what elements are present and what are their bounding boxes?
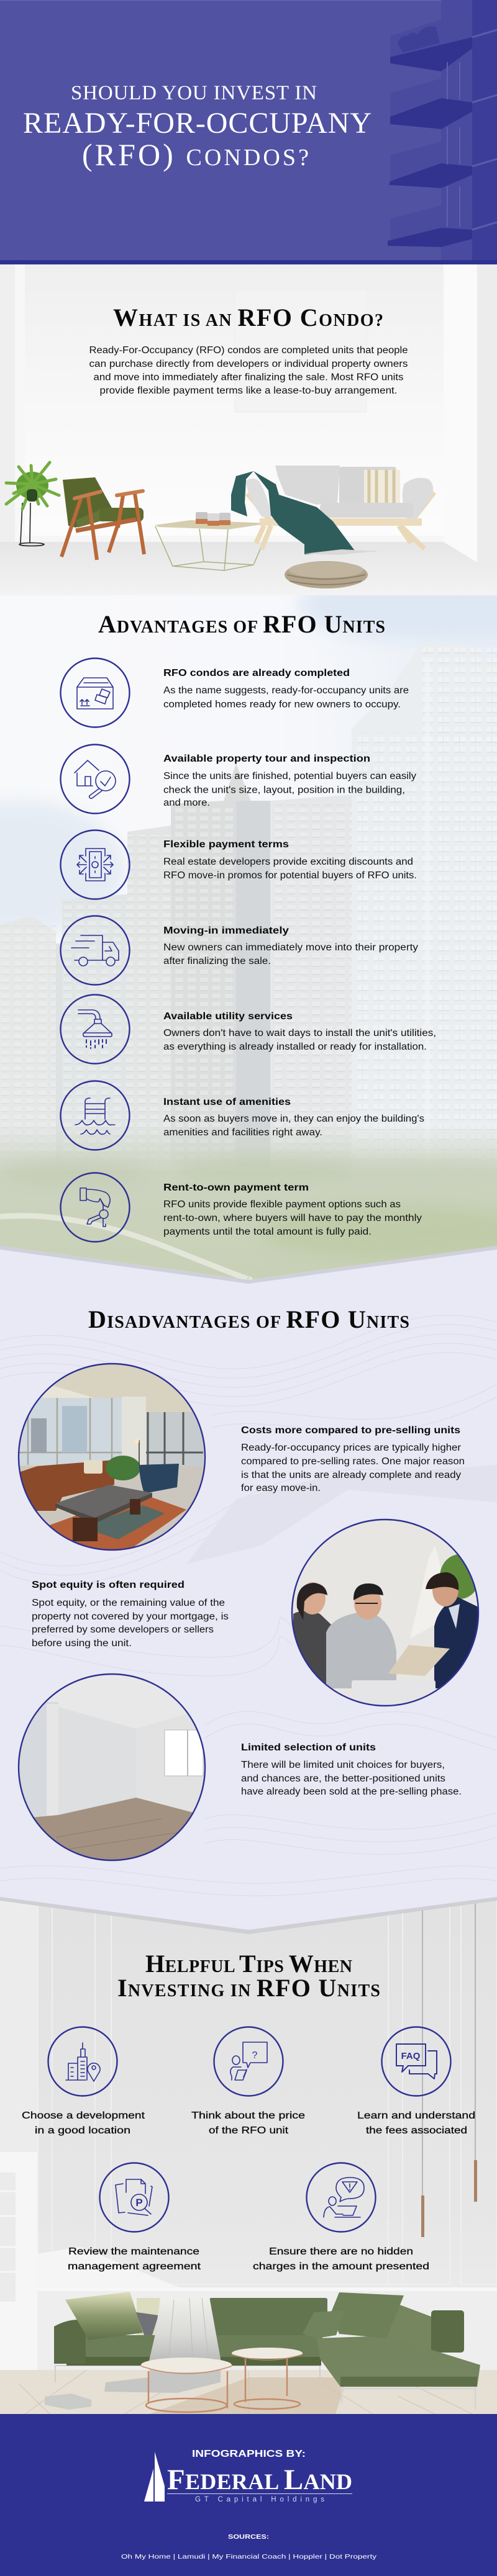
logo: Federal Land — [144, 2452, 352, 2503]
photo: empty room — [19, 1673, 205, 1862]
tip: choose a development: Choose a development — [22, 2110, 145, 2121]
image: green grounds — [0, 1124, 497, 1285]
title: SHOULD YOU INVEST IN — [71, 82, 317, 104]
item: amenities: Instant use of amenities — [163, 1097, 291, 1107]
item: rent to own — [61, 1173, 422, 1241]
image: condo balconies — [388, 0, 497, 260]
image: apartment towers — [0, 642, 497, 1279]
item: property tour: Available property tour and inspection — [163, 754, 370, 764]
icon: hand with keys — [80, 1188, 110, 1227]
heading: ADVANTAGES OF RFO UNITS — [98, 610, 385, 638]
item: amenities: As soon as buyers move in, they can enjoy the building's — [163, 1114, 424, 1124]
item: utilities — [61, 994, 436, 1064]
tip: think about the price — [191, 2027, 305, 2136]
text: costs more: Costs more compared to pre-selling units — [241, 1425, 460, 1436]
heading: HELPFUL TIPS WHEN — [145, 1950, 352, 1978]
panel: disadvantages of RFO units — [0, 1241, 497, 1934]
title — [23, 82, 372, 172]
text: costs more — [241, 1425, 465, 1493]
text: costs more: Ready-for-occupancy prices are typically higher — [241, 1443, 461, 1453]
image: sofa with teal throw — [231, 466, 434, 555]
description text: and move into immediately after finalizing the sale. Most RFO units — [93, 372, 404, 382]
item: amenities — [61, 1081, 424, 1150]
text: limited selection: and chances are, the better-positioned units — [241, 1773, 445, 1784]
description text: Ready-For-Occupancy (RFO) condos are completed units that people — [89, 345, 408, 356]
item: rent to own: Rent-to-own payment term — [163, 1182, 309, 1193]
item: utilities: Available utility services — [163, 1011, 293, 1022]
icon: house and magnifier — [75, 760, 116, 798]
text: limited selection: have already been sold at the pre-selling phase. — [241, 1786, 462, 1797]
item: flexible payment: RFO move-in promos for potential buyers of RFO units. — [163, 870, 417, 881]
text: costs more: compared to pre-selling rates. One major reason — [241, 1456, 465, 1467]
wall moulding panels — [38, 1887, 497, 2284]
text: costs more: for easy move-in. — [241, 1483, 321, 1493]
tip: review the maintenance agreement: P — [135, 2197, 143, 2209]
item: property tour: check the unit's size, layout, position in the building, — [163, 785, 405, 796]
item: rent to own: rent-to-own, where buyers will have to pay the monthly — [163, 1213, 422, 1223]
item: moving in: after finalizing the sale. — [163, 956, 271, 966]
tip: no hidden charges — [253, 2163, 429, 2272]
tip: review the maintenance agreement — [68, 2163, 201, 2272]
item: already completed: As the name suggests, ready-for-occupancy units are — [163, 685, 409, 696]
panel: footer — [0, 2414, 497, 2576]
tip: no hidden charges: charges in the amount presented — [253, 2261, 429, 2272]
item: rent to own: RFO units provide flexible payment options such as — [163, 1199, 401, 1210]
text: spot equity: Spot equity, or the remaining value of the — [32, 1598, 225, 1608]
item: moving in: New owners can immediately move into their property — [163, 942, 418, 953]
icon: pool ladder — [75, 1098, 115, 1134]
item: property tour: and more. — [163, 798, 210, 808]
heading — [117, 1950, 380, 2002]
description text: provide flexible payment terms like a lease-to-buy arrangement. — [99, 385, 398, 396]
heading: INVESTING IN RFO UNITS — [117, 1974, 380, 2002]
panel: advantages of RFO units — [0, 568, 497, 1285]
sources — [121, 2534, 377, 2560]
background wave lines — [0, 1315, 497, 1896]
tip: think about the price: ? — [252, 2050, 258, 2061]
text: costs more: is that the units are already complete and ready — [241, 1470, 461, 1480]
heading: DISADVANTAGES OF RFO UNITS — [88, 1305, 409, 1333]
logo: Federal Land: GT Capital Holdings — [195, 2496, 324, 2503]
image: round side tables — [45, 2348, 303, 2412]
text: limited selection: Limited selection of units — [241, 1742, 376, 1753]
tip: think about the price: Think about the price — [191, 2110, 305, 2121]
item: utilities: Owners don't have to wait days to install the unit's utilities, — [163, 1028, 436, 1038]
tip: learn the fees: the fees associated — [366, 2125, 467, 2136]
credit heading: INFOGRAPHICS BY: — [192, 2449, 306, 2459]
tip: think about the price: of the RFO unit — [209, 2125, 289, 2136]
item: property tour — [61, 745, 416, 813]
panel: helpful tips — [0, 1887, 497, 2415]
text: spot equity — [32, 1580, 229, 1649]
text: spot equity: preferred by some developers or sellers — [32, 1624, 214, 1635]
icon: delivery truck — [71, 935, 119, 966]
title: (RFO) CONDOS? — [82, 137, 309, 172]
image: green sectional sofa — [54, 2292, 480, 2410]
text: limited selection: There will be limited unit choices for buyers, — [241, 1760, 445, 1770]
title: READY-FOR-OCCUPANY — [23, 107, 372, 140]
image: coffee table with cups — [155, 512, 271, 570]
tip: choose a development — [22, 2027, 145, 2136]
tip: learn the fees: FAQ — [401, 2051, 421, 2061]
tip: learn the fees: Learn and understand — [357, 2110, 475, 2121]
tip: learn the fees — [357, 2027, 475, 2136]
panel: what is an RFO condo — [0, 264, 497, 595]
tip: no hidden charges: Ensure there are no hidden — [269, 2246, 413, 2257]
panel: hero header — [0, 0, 497, 264]
tip: review the maintenance agreement: Review the maintenance — [68, 2246, 199, 2257]
item: moving in — [61, 916, 418, 984]
tip: review the maintenance agreement: management agreement — [68, 2261, 201, 2272]
icon: box — [77, 678, 113, 709]
image: green armchair — [62, 477, 144, 560]
photo: furnished living room — [19, 1363, 205, 1553]
text: limited selection — [241, 1742, 462, 1797]
photo: agent with couple — [292, 1519, 480, 1706]
sources: Oh My Home | Lamudi | My Financial Coach | Hoppler | Dot Property — [121, 2553, 377, 2560]
text: spot equity: property not covered by your mortgage, is — [32, 1611, 229, 1622]
logo: Federal Land: FEDERAL LAND — [167, 2464, 352, 2496]
icon: banknote with arrows — [77, 849, 113, 881]
icon: shower — [78, 1010, 112, 1048]
text: spot equity: Spot equity is often required — [32, 1580, 185, 1590]
description text — [89, 345, 408, 396]
tip: choose a development: in a good location — [35, 2125, 130, 2136]
item: already completed: RFO condos are already completed — [163, 668, 350, 678]
item: amenities: amenities and facilities right away. — [163, 1127, 322, 1138]
sources: SOURCES: — [228, 2534, 269, 2541]
item: flexible payment — [61, 831, 417, 899]
item: already completed: completed homes ready for new owners to occupy. — [163, 699, 401, 710]
description text: can purchase directly from developers or individual property owners — [89, 359, 408, 369]
image: woven pouf — [285, 561, 368, 588]
item: flexible payment: Flexible payment terms — [163, 839, 289, 850]
item: property tour: Since the units are finished, potential buyers can easily — [163, 771, 416, 781]
image: fern on stand — [6, 462, 59, 546]
item: flexible payment: Real estate developers provide exciting discounts and — [163, 857, 413, 867]
item: already completed — [61, 658, 409, 727]
item: utilities: as everything is already installed or ready for installation. — [163, 1042, 427, 1052]
image: pendant lamps — [421, 1899, 477, 2237]
item: rent to own: payments until the total amount is fully paid. — [163, 1227, 372, 1237]
text: spot equity: before using the unit. — [32, 1638, 132, 1649]
item: moving in: Moving-in immediately — [163, 925, 289, 936]
heading: WHAT IS AN RFO CONDO? — [113, 304, 383, 331]
